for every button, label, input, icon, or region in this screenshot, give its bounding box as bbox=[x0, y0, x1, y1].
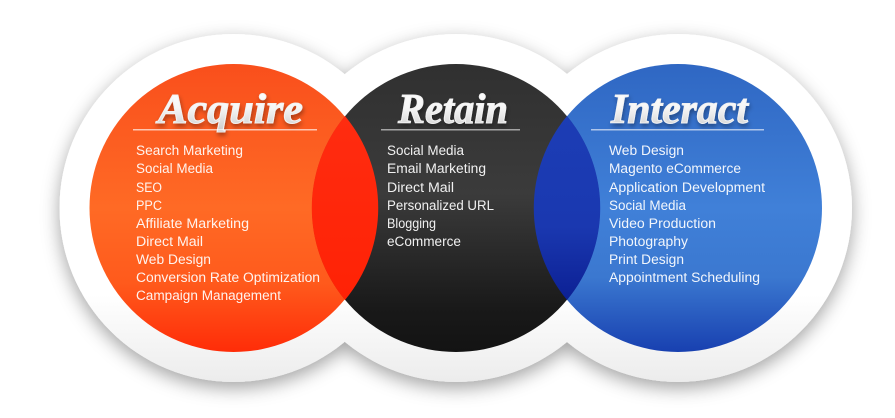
list: Interact services bbox=[609, 143, 765, 285]
list: Retain services: Blogging bbox=[387, 216, 436, 231]
list: Acquire services: SEO bbox=[136, 180, 162, 195]
list: Interact services: Video Production bbox=[609, 216, 716, 231]
list: Retain services: Direct Mail bbox=[387, 180, 454, 195]
circle: Retain black bbox=[312, 64, 600, 352]
list: Acquire services: Social Media bbox=[136, 161, 213, 176]
list: Interact services: Web Design bbox=[609, 143, 684, 158]
list: Retain services: eCommerce bbox=[387, 234, 461, 249]
list: Interact services: Appointment Scheduling bbox=[609, 270, 760, 285]
heading: Interact: Interact bbox=[610, 87, 749, 133]
panel: Interact bbox=[591, 87, 765, 285]
list: Interact services: Photography bbox=[609, 234, 688, 249]
overlap: Acquire and Retain bbox=[312, 116, 378, 300]
circle: Acquire orange bbox=[90, 64, 378, 352]
heading: Acquire: Acquire bbox=[155, 87, 303, 133]
circle: Interact blue bbox=[534, 64, 822, 352]
list: Interact services: Application Development bbox=[609, 180, 765, 195]
list: Interact services: Social Media bbox=[609, 198, 686, 213]
list: Acquire services: Direct Mail bbox=[136, 234, 203, 249]
list: Retain services: Personalized URL bbox=[387, 198, 494, 213]
list: Acquire services bbox=[136, 143, 320, 303]
list: Retain services: Email Marketing bbox=[387, 161, 486, 176]
heading: Retain: Retain bbox=[397, 87, 508, 133]
list: Interact services: Print Design bbox=[609, 252, 684, 267]
list: Retain services bbox=[387, 143, 494, 249]
list: Acquire services: Campaign Management bbox=[136, 288, 281, 303]
list: Retain services: Social Media bbox=[387, 143, 464, 158]
list: Acquire services: Affiliate Marketing bbox=[136, 216, 249, 231]
list: Acquire services: Search Marketing bbox=[136, 143, 243, 158]
list: Acquire services: Conversion Rate Optimization bbox=[136, 270, 320, 285]
list: Interact services: Magento eCommerce bbox=[609, 161, 741, 176]
list: Acquire services: Web Design bbox=[136, 252, 211, 267]
list: Acquire services: PPC bbox=[136, 198, 162, 213]
panel: Acquire bbox=[133, 87, 320, 303]
white outer badge backing bbox=[60, 34, 852, 382]
panel: Retain bbox=[381, 87, 520, 249]
overlap: Retain and Interact bbox=[534, 116, 600, 300]
